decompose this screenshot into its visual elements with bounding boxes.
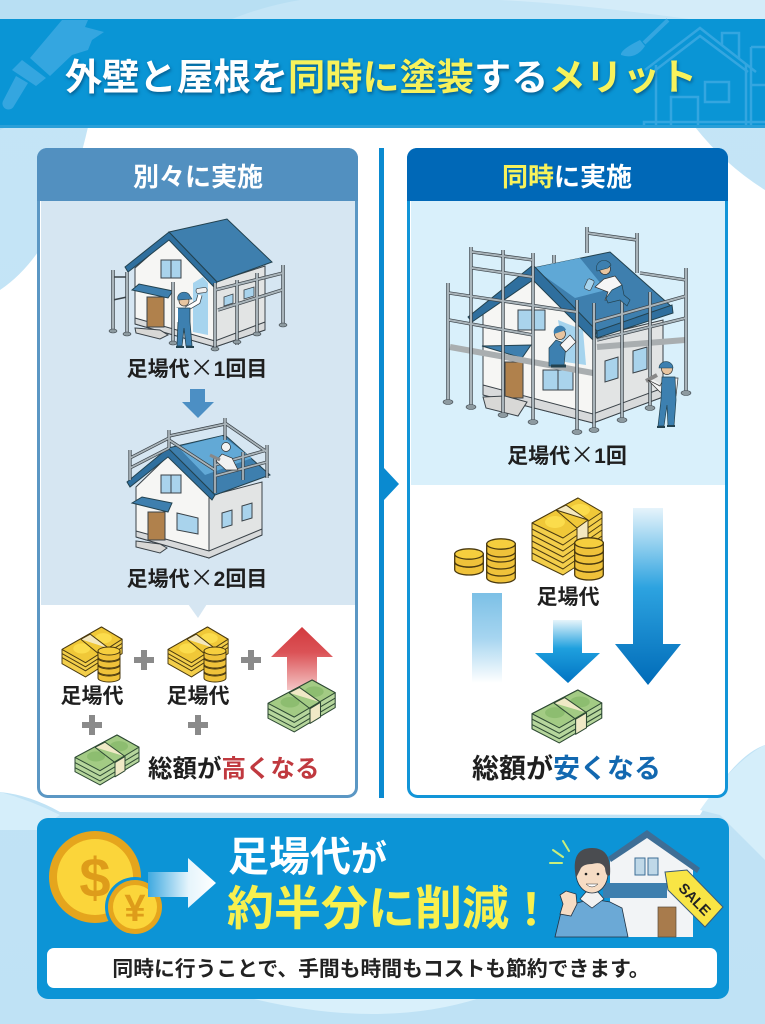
icon: dollar coin: $: [79, 846, 111, 909]
headline line 1: 足場代が: [228, 834, 387, 880]
arrow: red up: [271, 627, 333, 690]
icon: house outline right: [621, 20, 765, 125]
icon: worker on roof: [210, 442, 238, 470]
message pill: 同時に行うことで、手間も時間もコストも節約できます。: [112, 958, 650, 981]
panel: bottom summary: [37, 818, 729, 999]
icon: green cash bottom: [75, 735, 139, 785]
panel: simultaneous: [407, 148, 728, 796]
divider with arrow: [379, 148, 399, 798]
message pill: [47, 948, 717, 988]
result: higher total: 総額が高くなる: [148, 754, 320, 783]
icon: man: [550, 841, 628, 937]
icon: small coin stacks: [455, 539, 515, 583]
title: 外壁と屋根を同時に塗装するメリット: [65, 56, 697, 98]
icon: tall gold stack: [532, 498, 603, 580]
pointer: [188, 604, 207, 618]
scaffolding: [448, 227, 686, 432]
icon: paintbrush left: [2, 20, 104, 110]
icon: worker at wall: [549, 326, 576, 366]
label: scaffold once: 足場代×1回: [507, 435, 627, 470]
result: lower total: 総額が安くなる: [472, 753, 661, 784]
arrow: mid down: [535, 620, 600, 683]
icon: gold stack 1: [62, 627, 122, 682]
plus: [134, 650, 154, 670]
icon: worker on roof: [584, 260, 630, 306]
label: 足場代: [60, 685, 124, 708]
icon: worker with roller: [176, 287, 207, 347]
house 2 with roof scaffold: [127, 418, 270, 558]
panel: separately: [37, 148, 358, 796]
plus: [188, 715, 208, 735]
icon: worker on ground: [646, 362, 678, 427]
headline line 2: 約半分に削減！: [227, 882, 553, 935]
icon: yen coin: ¥: [124, 888, 146, 930]
arrow: long down: [615, 508, 681, 685]
plus: [82, 715, 102, 735]
faded bar: [472, 593, 502, 683]
label: 足場代: [536, 586, 600, 609]
icon: gold stack 2: [168, 627, 228, 682]
plus: [241, 650, 261, 670]
arrow: down: [182, 389, 214, 418]
sale tag: SALE: [675, 881, 713, 920]
label: 足場代: [166, 685, 230, 708]
panel heading: 別々に実施: [133, 162, 263, 192]
house 1 with wall scaffold: [109, 219, 287, 351]
label: scaffold first time: 足場代×1回目: [127, 348, 267, 383]
arrow: right: [148, 858, 216, 908]
icon: house with sale tag: [603, 830, 723, 937]
panel heading: 同時に実施: [502, 162, 632, 192]
icon: dollar coin: [49, 831, 141, 923]
icon: green cash: [532, 690, 602, 743]
icon: yen coin: [105, 877, 165, 937]
icon: green cash right: [268, 680, 335, 732]
label: scaffold second time: 足場代×2回目: [127, 558, 267, 593]
header banner: [0, 19, 765, 128]
house with full scaffold: [443, 227, 691, 434]
